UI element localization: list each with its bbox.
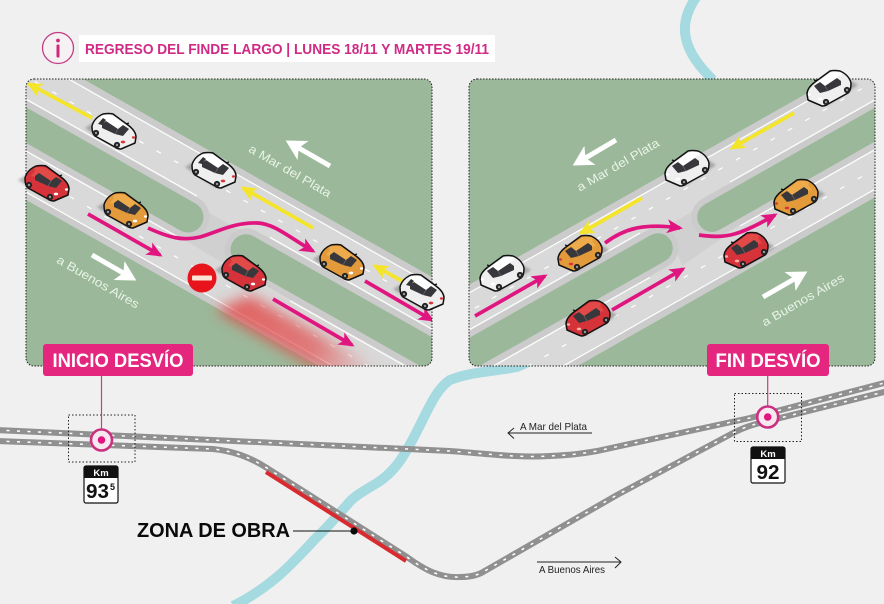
median kerbs left — [26, 100, 432, 366]
white arrow to Mar del Plata — [290, 143, 330, 166]
white arrow to Buenos Aires — [763, 274, 803, 297]
car orange left — [558, 236, 609, 271]
panel border left — [26, 79, 432, 366]
km sign 93.5: Km — [93, 468, 109, 479]
direction arrow yellow 1 — [732, 113, 794, 148]
direction arrow pink 1 — [88, 214, 160, 255]
panel border right — [469, 79, 875, 366]
label a Mar del Plata: a Mar del Plata — [246, 142, 334, 200]
km sign 92: 92 — [756, 462, 780, 484]
car red right — [724, 232, 775, 268]
header info icon — [42, 32, 74, 64]
median islands left — [26, 108, 432, 366]
km sign 93.5 — [84, 466, 118, 503]
white arrow to Mar del Plata — [577, 140, 616, 163]
car orange right — [774, 180, 825, 215]
road surface left — [26, 79, 432, 366]
km sign 93.5: 5 — [110, 482, 115, 492]
panel: fin desvio — [468, 70, 876, 366]
km sign 92 — [751, 447, 785, 484]
title: REGRESO DEL FINDE LARGO | LUNES 18/11 Y MARTES 19/11 — [85, 41, 489, 58]
car white 1 — [85, 114, 136, 149]
callout zona de obra: ZONA DE OBRA — [137, 520, 290, 542]
label a Buenos Aires: a Buenos Aires — [54, 253, 142, 311]
road to Buenos Aires — [0, 391, 884, 577]
white arrow to Buenos Aires — [92, 255, 132, 278]
direction label A Mar del Plata — [508, 421, 592, 438]
badge inicio desvio: INICIO DESVÍO — [52, 350, 184, 372]
badge inicio desvio — [43, 344, 193, 376]
marker km 92 — [734, 376, 802, 442]
panel: inicio desvio — [18, 78, 445, 366]
work zone — [266, 472, 406, 561]
exit arrow pink — [699, 215, 775, 236]
car orange 1 — [97, 192, 148, 228]
badge fin desvio — [707, 344, 829, 376]
direction arrow yellow 2 — [581, 198, 642, 233]
car white middle — [665, 150, 716, 186]
direction label A Buenos Aires: A Buenos Aires — [539, 564, 605, 576]
direction arrow yellow 1 — [29, 84, 92, 118]
car red left — [566, 300, 617, 336]
road lines right — [469, 88, 875, 366]
direction arrow yellow 2 — [243, 188, 313, 228]
callout zona de obra — [137, 520, 358, 542]
car white 2 — [185, 152, 236, 188]
highway map — [0, 382, 884, 577]
river — [233, 0, 710, 604]
median islands right — [469, 108, 875, 366]
detour arrow pink — [605, 226, 680, 243]
direction label A Buenos Aires — [537, 557, 621, 576]
road surface right — [469, 79, 875, 366]
label a Buenos Aires: a Buenos Aires — [759, 271, 847, 329]
direction arrow pink 3 — [612, 269, 683, 310]
closed lane red glow — [212, 289, 370, 366]
road lines left — [26, 79, 432, 366]
detour arrow pink — [148, 223, 313, 251]
km sign 92: Km — [760, 449, 776, 460]
direction arrow yellow 3 — [375, 266, 402, 281]
direction arrow pink 4 — [365, 281, 432, 320]
direction arrow pink 1 — [475, 276, 545, 316]
km sign 93.5: 93 — [86, 481, 109, 503]
road to Mar del Plata — [0, 382, 884, 457]
no entry sign — [188, 264, 216, 292]
car red 1 — [18, 166, 69, 201]
car red stopped — [215, 256, 266, 291]
car white 3 — [393, 274, 444, 310]
direction label A Mar del Plata: A Mar del Plata — [520, 421, 587, 433]
direction arrow pink 3 — [273, 299, 352, 345]
median kerbs right — [469, 101, 875, 366]
car white left — [480, 256, 531, 291]
car white top — [807, 70, 858, 106]
car orange 2 — [313, 244, 364, 280]
badge fin desvio: FIN DESVÍO — [716, 350, 820, 372]
label a Mar del Plata: a Mar del Plata — [574, 136, 662, 194]
marker km 93.5 — [68, 376, 135, 462]
title — [79, 35, 495, 62]
